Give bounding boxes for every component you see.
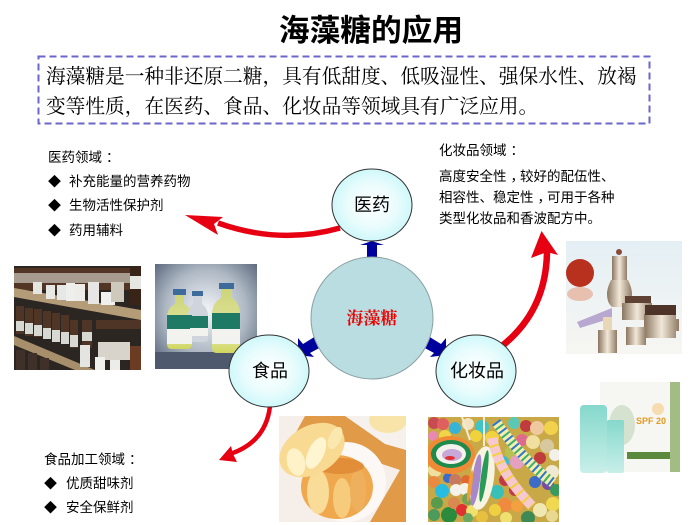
photo: cosmetics set [566,241,682,354]
text block: food field: 安全保鲜剂 [66,499,134,515]
intro text box: 变等性质，在医药、食品、化妆品等领域具有广泛应用。 [46,96,538,118]
title: 海藻糖的应用 [279,13,463,48]
photo: bread [279,416,406,522]
node: food [229,335,309,407]
text block: medicine field: 补充能量的营养药物 [69,174,190,189]
text block: medicine field: 生物活性保护剂 [69,198,164,213]
text block: medicine field: 医药领域 ： [48,150,120,165]
text block: food field: 食品加工领域 ： [44,451,142,467]
hub circle: trehalose: 海藻糖 [346,308,398,328]
node: cosmetics [436,335,516,407]
text block: food field [44,451,142,515]
hub circle: trehalose [311,257,433,379]
text block: cosmetics field: 化妆品领域 ： [439,143,524,158]
node: food: 食品 [252,361,288,381]
node: medicine: 医药 [354,195,390,215]
photo: SPF 20 sunscreen box [580,382,680,473]
text block: food field: ◆ [44,500,57,515]
red arrow: medicine [185,215,340,235]
text block: medicine field [48,150,190,238]
photo: candy [425,417,562,525]
text block: cosmetics field [439,143,614,226]
red arrow: cosmetics [502,231,558,346]
text block: medicine field: ◆ [48,223,61,238]
text block: medicine field: ◆ [48,198,61,213]
intro text box: 海藻糖是一种非还原二糖，具有低甜度、低吸湿性、强保水性、放褐 [46,66,637,88]
red arrow: food [219,406,270,462]
blue arrow: lower right [421,336,446,357]
text block: food field: ◆ [44,476,57,491]
photo: infusion bottles [155,264,257,369]
photo: pharmacy shelves [14,266,141,370]
photo: SPF 20 sunscreen box: SPF 20 [636,416,666,426]
node: cosmetics: 化妆品 [450,361,504,381]
text block: cosmetics field: 类型化妆品和香波配方中。 [439,211,601,226]
text block: cosmetics field: 相容性、稳定性 ，可用于各种 [439,189,614,205]
text block: medicine field: ◆ [48,174,61,189]
text block: food field: 优质甜味剂 [66,476,134,491]
node: medicine [332,169,412,241]
blue arrow: lower left [298,336,323,357]
intro text box [38,56,650,124]
blue arrow: up [360,241,384,257]
text block: medicine field: 药用辅料 [69,223,123,238]
text block: cosmetics field: 高度安全性 ，较好的配伍性、 [439,168,614,184]
